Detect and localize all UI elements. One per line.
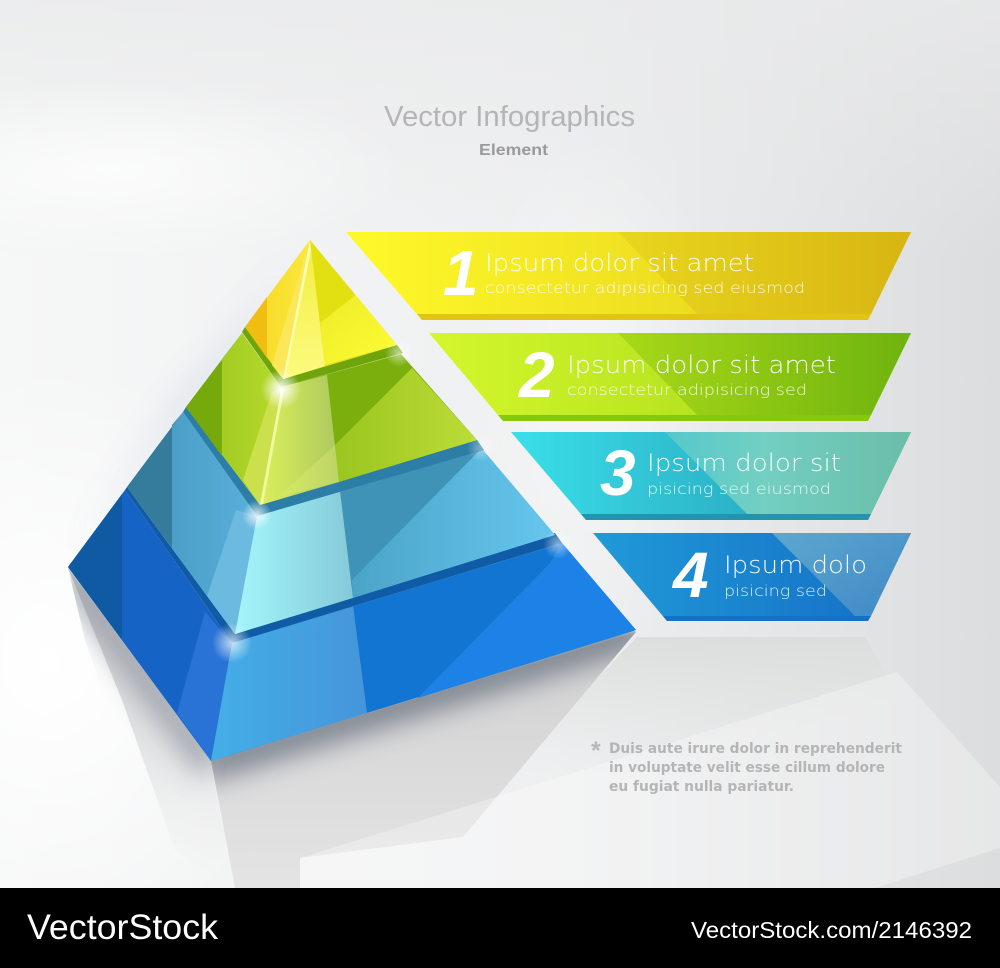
footnote text: Duis aute irure dolor in reprehenderit [609,741,902,757]
footer logo: VectorStock [27,908,219,947]
number 4: 4 [671,539,709,611]
ribbon 1 [346,232,911,320]
ribbon 4 heading: Ipsum dolo [724,551,867,579]
ribbon 4 [593,533,911,621]
pyramid shadow [68,255,1000,888]
footer bar [0,888,1000,968]
number 2: 2 [518,339,555,411]
ribbon 2 text: consectetur adipisicing sed [567,381,807,399]
footnote asterisk: * [591,737,601,765]
number 3: 3 [600,437,636,509]
ribbon 2 heading: Ipsum dolor sit amet [567,351,836,379]
tier 4: blue base [68,487,636,761]
title: Vector Infographics [384,101,635,133]
footnote [591,737,902,795]
subtitle: Element [479,142,549,159]
ribbon 3 heading: Ipsum dolor sit [647,449,841,477]
tier 1: yellow [245,240,397,379]
ribbon 4 text: pisicing sed [724,582,827,600]
ribbon 3 text: pisicing sed eiusmod [647,480,831,498]
ribbon 1 heading: Ipsum dolor sit amet [485,249,754,277]
light glints [212,339,573,663]
pyramid [68,240,636,761]
ribbon 3 [511,432,911,520]
footnote text: eu fugiat nulla pariatur. [609,779,794,795]
number 1: 1 [443,237,479,309]
footer url: VectorStock.com/2146392 [691,917,972,943]
ribbon 1 text: consectetur adipisicing sed eiusmod [485,279,805,297]
tier 3: teal [127,407,555,634]
tier 2: green [186,327,477,505]
ribbon 2 [429,333,911,421]
footnote text: in voluptate velit esse cillum dolore [609,760,885,776]
